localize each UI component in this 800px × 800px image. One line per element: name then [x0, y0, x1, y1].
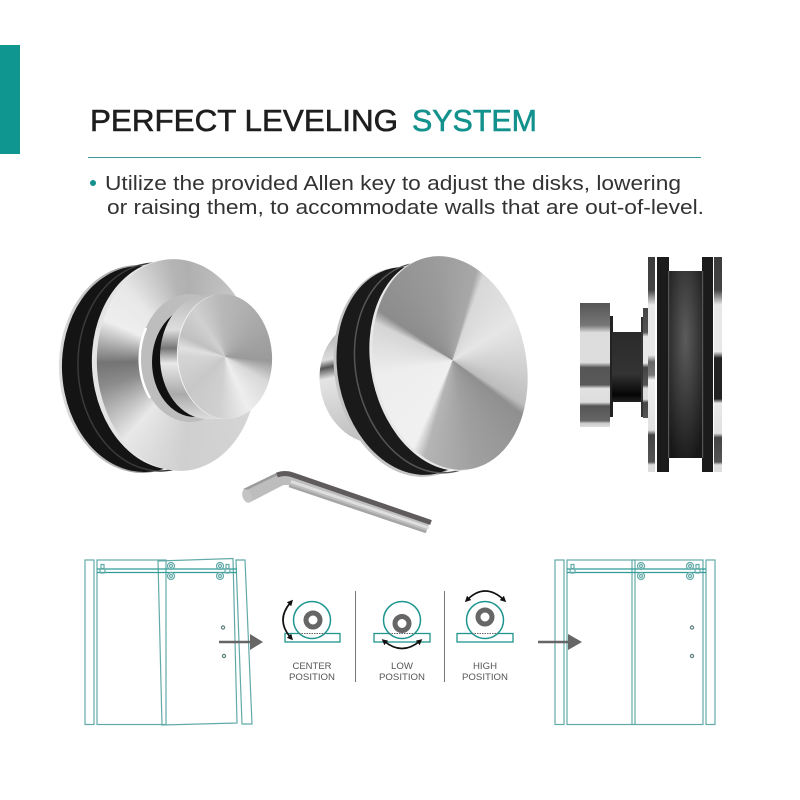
icon: allen key [242, 471, 432, 534]
title: PERFECT LEVELING [90, 103, 398, 138]
bullet text block: or raising them, to accommodate walls that are out-of-level. [107, 197, 704, 219]
diagram: out-of-level door with arrow [84, 558, 263, 726]
icon: high position: HIGH [473, 661, 497, 671]
icon: center position: POSITION [289, 672, 335, 682]
accent bar [0, 45, 20, 154]
bullet text block [90, 173, 704, 219]
title [90, 103, 537, 138]
bullet text block: Utilize the provided Allen key to adjust the disks, lowering [105, 173, 681, 195]
icon: center position: CENTER [292, 661, 332, 671]
icon: center position [282, 600, 341, 682]
icon: low position: POSITION [379, 672, 425, 682]
product: roller back view with flat disk [320, 256, 528, 477]
product: roller side view [580, 257, 722, 472]
title: SYSTEM [412, 103, 537, 138]
product: roller front view with knob [59, 259, 272, 473]
icon: low position [373, 600, 431, 682]
diagram: leveled door with arrow [538, 559, 716, 726]
icon: low position: LOW [391, 661, 414, 671]
icon: high position: POSITION [462, 672, 508, 682]
icon: high position [456, 590, 514, 682]
